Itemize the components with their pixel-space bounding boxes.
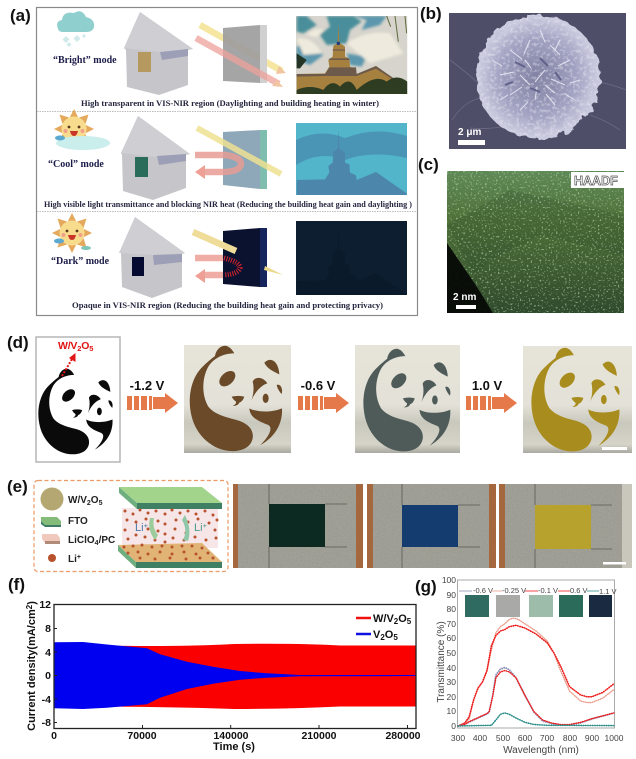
y axis tick labels xyxy=(39,599,51,729)
W/V2O5 label: W/V xyxy=(58,340,77,352)
photo: dark building xyxy=(296,221,407,301)
y ticks: 20 xyxy=(447,692,456,702)
ion arrow left xyxy=(149,518,158,540)
x ticks: 800 xyxy=(563,733,577,743)
legend: W/V2O5: 5 xyxy=(99,500,103,507)
x ticks: 900 xyxy=(585,733,599,743)
legend: FTO xyxy=(41,516,88,527)
photo: building in cool tint xyxy=(296,123,407,200)
scale label: 2 nm xyxy=(453,292,476,303)
legend: W/V2O5: W/V xyxy=(68,495,87,506)
arrow 2 xyxy=(298,393,349,413)
cool mode row xyxy=(44,109,412,209)
y ticks: 30 xyxy=(447,677,456,687)
W/V2O5 label: 2 xyxy=(77,344,81,353)
y axis title: 2 xyxy=(25,604,34,609)
y ticks: 60 xyxy=(447,633,456,643)
yellow light beam through pane xyxy=(197,128,281,174)
legend: V xyxy=(373,629,380,641)
residual light tip xyxy=(264,266,283,275)
flake grain xyxy=(476,15,600,139)
label box: HAADF xyxy=(574,174,618,188)
photo: dark device xyxy=(233,484,363,568)
legend: W/V2O5: O xyxy=(91,495,99,506)
arrow 3 xyxy=(466,393,517,413)
arrow heads xyxy=(272,66,286,87)
voltage 1.0 V: 1.0 V xyxy=(472,378,503,393)
legend: 5 xyxy=(393,633,398,642)
y ticks: 50 xyxy=(447,648,456,658)
y axis tick labels: -4 xyxy=(42,694,51,706)
arrow head xyxy=(69,353,76,362)
x axis tick labels: 210000 xyxy=(301,730,337,742)
legend: Li+ xyxy=(48,554,81,565)
legend: 2 xyxy=(380,633,385,642)
legend: Li+: + xyxy=(77,554,81,561)
x ticks: 400 xyxy=(473,733,487,743)
y axis title: ) xyxy=(26,601,38,605)
legend: LiClO4/PC: 4 xyxy=(95,540,99,547)
curve -0.25 V xyxy=(458,618,614,726)
legend: O xyxy=(398,613,407,625)
panel f: current density chart xyxy=(25,599,421,753)
scale bar xyxy=(456,305,476,309)
photo: yellow device xyxy=(499,484,632,568)
legend: FTO: FTO xyxy=(68,516,88,527)
icon: tinted pane xyxy=(223,130,267,189)
scale label: 2 μm xyxy=(458,127,481,138)
x axis tick labels: 280000 xyxy=(385,730,421,742)
legend: LiClO4/PC: LiClO xyxy=(68,535,95,546)
photo: building in daylight xyxy=(296,16,407,94)
icon: sun with small clouds xyxy=(52,213,92,253)
y ticks: 100 xyxy=(442,575,456,585)
mode label: cool: “Cool” mode xyxy=(48,159,104,170)
Li ions xyxy=(124,510,217,559)
icon: sun over cloud xyxy=(54,109,110,150)
caption: dark mode: Opaque in VIS-NIR region (Reducing the building heat gain and protecting privacy) xyxy=(72,301,383,310)
y ticks xyxy=(442,575,456,731)
icon: dark pane xyxy=(223,228,267,287)
y axis tick labels: 4 xyxy=(45,647,51,659)
legend row: -0.6 V xyxy=(473,586,493,595)
Li label left: Li xyxy=(135,522,144,534)
bright mode row xyxy=(53,11,407,108)
voltage -0.6 V: -0.6 V xyxy=(301,378,336,393)
ticks xyxy=(54,628,408,728)
x axis tick labels: 0 xyxy=(51,730,57,742)
axes frame xyxy=(54,604,416,728)
photo: grey panda xyxy=(355,345,460,453)
x axis tick labels xyxy=(51,730,421,742)
W/V2O5 label: O xyxy=(81,340,89,352)
curve -0.1 V xyxy=(458,625,614,726)
y ticks: 90 xyxy=(447,590,456,600)
photo: yellow panda xyxy=(523,346,632,453)
mode label: dark: “Dark” mode xyxy=(51,256,110,267)
legend row: -0.1 V xyxy=(538,586,558,595)
red dots inside pane xyxy=(224,258,240,275)
panel b: SEM microsphere xyxy=(449,13,626,149)
panel e: device schematic and photos xyxy=(34,480,632,572)
legend row: -0.25 V xyxy=(502,586,526,595)
panel c label: (c) xyxy=(418,155,439,174)
legend row: 0.6 V xyxy=(570,586,588,595)
panel d: panda pattern sequence xyxy=(36,337,632,462)
legend: LiClO4/PC xyxy=(42,534,115,547)
y axis tick labels: 0 xyxy=(45,670,51,682)
red NIR beam passing through xyxy=(196,38,279,84)
x axis tick labels: 140000 xyxy=(213,730,249,742)
legend: W/V2O5: 2 xyxy=(87,500,91,507)
y axis title: Transmittance (%) xyxy=(436,621,447,703)
x ticks xyxy=(451,733,624,743)
y ticks: 10 xyxy=(447,706,456,716)
panel d label: (d) xyxy=(7,333,29,352)
y axis tick labels: 8 xyxy=(45,623,51,635)
curve 0.6 V xyxy=(458,670,614,726)
y ticks: 70 xyxy=(447,619,456,629)
icon: glass pane clear xyxy=(223,25,267,83)
legend row xyxy=(459,586,617,596)
panda logo card xyxy=(36,337,120,462)
panel a: three window modes xyxy=(36,8,418,316)
panel g label: (g) xyxy=(415,577,437,596)
blue V2O5 envelope xyxy=(54,642,416,709)
red W/V2O5 envelope xyxy=(54,644,416,709)
W/V2O5 label: 5 xyxy=(89,344,93,353)
dark support corner xyxy=(447,243,493,313)
y axis title: Current density(mA/cm xyxy=(26,609,38,731)
legend: 2 xyxy=(394,617,399,626)
speckles xyxy=(447,171,624,313)
dark mode row xyxy=(51,213,407,310)
icon: house with clear window xyxy=(124,12,193,95)
flake texture xyxy=(492,30,580,110)
cell schematic xyxy=(118,487,222,568)
Li label right: Li xyxy=(194,522,203,534)
legend: O xyxy=(385,629,394,641)
icon: snow cloud xyxy=(57,11,94,47)
panel f label: (f) xyxy=(8,575,25,594)
photo: blue device xyxy=(367,484,496,568)
yellow light beam passing through xyxy=(200,25,282,71)
panel e label: (e) xyxy=(7,477,28,496)
curve 1.1 V xyxy=(458,713,614,726)
red NIR beam reflected xyxy=(195,155,241,172)
y ticks: 0 xyxy=(451,721,456,731)
legend: Li+: Li xyxy=(68,554,77,565)
x ticks: 1000 xyxy=(605,733,624,743)
x ticks: 500 xyxy=(496,733,510,743)
curve -0.6 V xyxy=(458,668,614,726)
mode label: bright: “Bright” mode xyxy=(53,55,117,66)
red NIR beam reflected xyxy=(195,258,223,275)
x axis title: Wavelength (nm) xyxy=(503,745,579,756)
legend xyxy=(356,613,412,642)
panel g: transmittance chart xyxy=(436,575,624,756)
y axis tick labels: -8 xyxy=(42,717,51,729)
colour swatches xyxy=(465,595,612,617)
x ticks: 700 xyxy=(540,733,554,743)
legend row: 1.1 V xyxy=(599,587,617,596)
y ticks: 80 xyxy=(447,604,456,614)
scale bar xyxy=(458,140,485,145)
legend: W/V xyxy=(373,613,394,625)
Li label left: + xyxy=(144,521,149,530)
legend: 5 xyxy=(407,617,412,626)
icon: house with dark window xyxy=(119,217,185,298)
voltage -1.2 V: -1.2 V xyxy=(130,378,165,393)
panel b label: (b) xyxy=(420,4,442,23)
caption: cool mode: High visible light transmittance and blocking NIR heat (Reducing the building heat gain and daylighting ) xyxy=(44,200,412,209)
dashed schematic box xyxy=(34,480,228,572)
plot frame xyxy=(458,580,614,728)
icon: house with green window xyxy=(121,116,190,200)
photo: brown panda xyxy=(184,345,291,453)
x ticks: 300 xyxy=(451,733,465,743)
dotted red arrow xyxy=(62,359,72,376)
x ticks: 600 xyxy=(518,733,532,743)
sphere xyxy=(476,15,600,139)
dark texture patches xyxy=(505,58,561,92)
reflected arrow head xyxy=(195,269,205,283)
ion arrow right xyxy=(182,515,189,541)
arrow 1 xyxy=(127,393,178,413)
x axis title: Time (s) xyxy=(213,741,255,753)
y axis tick labels: 12 xyxy=(39,599,51,611)
panel a label: (a) xyxy=(10,6,31,25)
legend: LiClO4/PC: /PC xyxy=(99,535,115,546)
Li label right: + xyxy=(203,521,208,530)
panel c: HAADF mapping xyxy=(447,171,624,313)
y ticks: 40 xyxy=(447,663,456,673)
caption: bright mode: High transparent in VIS-NIR region (Daylighting and building heating in winter) xyxy=(81,99,379,108)
x axis tick labels: 70000 xyxy=(127,730,157,742)
legend: W/V2O5 xyxy=(40,488,103,510)
reflected arrow head xyxy=(195,165,205,179)
yellow light beam blocked xyxy=(193,232,236,251)
